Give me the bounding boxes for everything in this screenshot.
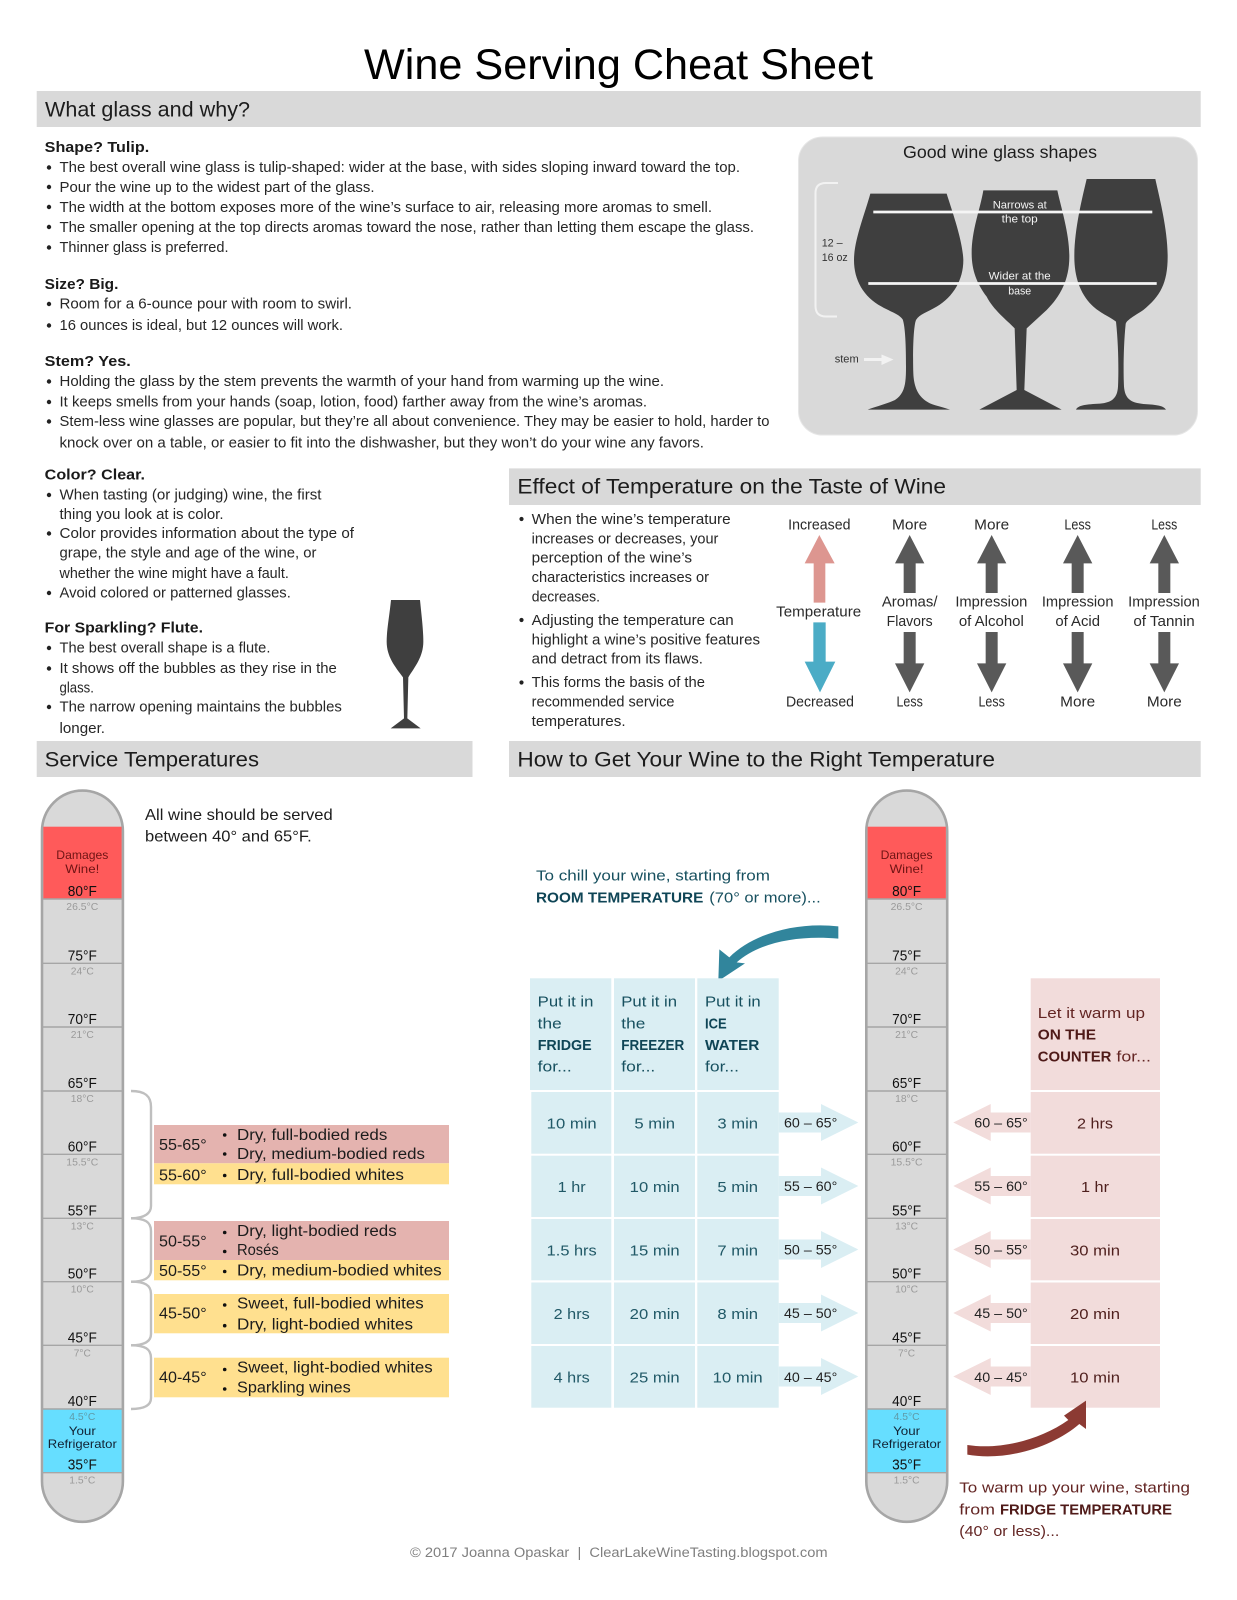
arrow: stem — [835, 354, 894, 366]
text block: temperature effect bullets: increases or decreases, your — [532, 531, 719, 547]
section header: service temperatures — [37, 741, 472, 777]
text block: sparkling: The best overall shape is a flute. — [60, 640, 270, 656]
text block: color: Color provides information about the type of — [60, 526, 354, 542]
thermometer: how to get to temperature: 15.5°C — [891, 1156, 923, 1168]
text block: sparkling — [45, 621, 342, 737]
thermometer: service temperatures: 35°F — [68, 1458, 97, 1474]
text block: shape: The best overall wine glass is tulip-shaped: wider at the base, with sides sloping inward toward the top. — [60, 160, 740, 176]
row: 45-50: 8 min — [717, 1307, 758, 1323]
row: 40-45: 25 min — [630, 1370, 680, 1386]
text block: to warm up your wine: To warm up your wine, starting — [959, 1481, 1190, 1497]
arrow column: acid: of Acid — [1055, 614, 1100, 630]
annotation: narrows at the top: the top — [1002, 214, 1038, 226]
text block: to warm up your wine: from — [959, 1502, 995, 1518]
header: ice water: WATER — [705, 1038, 760, 1054]
wine row: 45-50 whites: Dry, light-bodied whites — [237, 1316, 413, 1333]
arrows: chill ranges pointing to thermometer: 50 – 55° — [784, 1241, 837, 1257]
warm time values: 2 hrs — [1077, 1116, 1113, 1132]
text block: sparkling: longer. — [60, 721, 105, 737]
arrow: warm red curved — [967, 1401, 1086, 1456]
warm time values: 20 min — [1070, 1307, 1120, 1323]
thermometer: how to get to temperature — [866, 791, 947, 1522]
annotation: wider at the base: base — [1008, 285, 1031, 297]
text block: color: grape, the style and age of the wine, or — [60, 546, 317, 562]
arrow column: alcohol: of Alcohol — [959, 614, 1024, 630]
header: freezer: Put it in — [621, 995, 677, 1011]
row: 60-65 — [547, 1116, 758, 1132]
wine row: 55-65 reds: 55-65° — [159, 1137, 207, 1154]
section header: What glass and why — [37, 91, 1201, 127]
wine row: 40-45 whites and sparkling: Sparkling wines — [237, 1379, 351, 1396]
section header: how to get your wine to the right temperature: How to Get Your Wine to the Right Temperature — [517, 748, 995, 772]
text block: temperature effect bullets: recommended service — [532, 695, 675, 711]
thermometer: how to get to temperature: 13°C — [895, 1220, 919, 1232]
text block: to warm up your wine: (40° or less)... — [959, 1524, 1059, 1540]
arrow: stem: stem — [835, 354, 859, 366]
thermometer: how to get to temperature: 80°F — [892, 884, 921, 900]
header: ice water: Put it in — [705, 995, 761, 1011]
arrows: warm ranges pointing to thermometer: 40 – 45° — [974, 1369, 1028, 1385]
wine glass silhouettes — [854, 179, 1168, 410]
header: on the counter — [1038, 1006, 1151, 1066]
arrow column: temperature: Increased — [788, 517, 850, 533]
header: ice water — [705, 995, 761, 1076]
arrows: chill ranges pointing to thermometer: 45 – 50° — [784, 1305, 837, 1321]
wine row: 45-50 whites: Sweet, full-bodied whites — [237, 1295, 424, 1312]
text block: stem: Stem-less wine glasses are popular, but they’re all about convenience. They may be easier to hold, harder to — [60, 414, 770, 430]
annotation: wider at the base — [989, 271, 1051, 297]
arrows: warm ranges pointing to thermometer: 45 – 50° — [974, 1305, 1028, 1321]
header: on the counter: Let it warm up — [1038, 1006, 1145, 1022]
text block: temperature effect bullets: decreases. — [532, 590, 600, 606]
thermometer: service temperatures: 45°F — [68, 1330, 97, 1346]
row: 50-55: 7 min — [717, 1244, 758, 1260]
arrows: chill ranges pointing to thermometer: 55 – 60° — [784, 1178, 837, 1194]
text block: color — [45, 468, 354, 601]
warm time values: 1 hr — [1081, 1180, 1109, 1196]
thermometer: how to get to temperature: 4.5°C — [894, 1411, 920, 1423]
arrow column: acid: Impression — [1042, 595, 1113, 611]
panel heading: Good wine glass shapes — [903, 142, 1097, 162]
wine row: 50-55 whites — [154, 1260, 449, 1280]
header: fridge: the — [538, 1016, 562, 1032]
text block: stem: knock over on a table, or easier to fit into the dishwasher, but they won’t do your wine any favors. — [60, 435, 704, 451]
arrow column: temperature — [776, 517, 861, 711]
thermometer: service temperatures: Your — [69, 1424, 96, 1438]
arrow column: temperature: Decreased — [786, 695, 854, 711]
panel: good wine glass shapes — [798, 137, 1198, 435]
arrow column: temperature: Temperature — [776, 605, 861, 621]
arrows: chill ranges pointing to thermometer: 60 – 65° — [784, 1114, 837, 1130]
arrow column: alcohol — [955, 517, 1027, 711]
text block: size: Room for a 6-ounce pour with room to swirl. — [60, 297, 352, 313]
guide lines — [868, 212, 1157, 284]
arrows: chill ranges pointing to thermometer — [779, 1104, 858, 1395]
arrow column: acid — [1042, 517, 1113, 711]
annotation: wider at the base: Wider at the — [989, 271, 1051, 283]
wine row: 55-65 reds: Dry, full-bodied reds — [237, 1127, 388, 1144]
arrow: chill teal curved — [718, 925, 838, 981]
text block: serving range — [145, 807, 333, 846]
wine row: 50-55 reds and roses: Rosés — [237, 1242, 279, 1259]
text block: temperature effect bullets — [519, 512, 760, 730]
wine row: 55-65 reds — [154, 1125, 449, 1163]
header: freezer — [621, 995, 685, 1076]
text block: color: whether the wine might have a fault. — [58, 566, 289, 582]
text block: shape: The smaller opening at the top directs aromas toward the nose, rather than letting them escape the glass. — [60, 220, 754, 236]
header: freezer: FREEZER — [621, 1038, 685, 1054]
arrow column: tannin: Less — [1151, 517, 1177, 533]
text block: shape: Pour the wine up to the widest part of the glass. — [60, 180, 375, 196]
section header: effect of temperature — [509, 468, 1201, 505]
thermometer: how to get to temperature: 70°F — [892, 1012, 921, 1028]
icon: flute glass — [387, 600, 423, 728]
row: 45-50 — [554, 1307, 758, 1323]
row: 40-45 — [554, 1370, 763, 1386]
table cells — [1031, 978, 1160, 1408]
wine row: 55-60 whites: Dry, full-bodied whites — [237, 1167, 404, 1184]
text block: shape: Thinner glass is preferred. — [60, 240, 228, 256]
thermometer: service temperatures: 55°F — [68, 1203, 97, 1219]
text block: to chill your wine: To chill your wine, starting from — [536, 869, 770, 885]
text block: temperature effect bullets: When the wine’s temperature — [532, 512, 731, 528]
text block: size: Size? Big. — [45, 277, 118, 293]
thermometer: service temperatures: 40°F — [68, 1394, 97, 1410]
thermometer: service temperatures: 7°C — [74, 1347, 91, 1359]
table: chill times — [530, 978, 779, 1408]
arrows: chill ranges pointing to thermometer: 40 – 45° — [784, 1369, 837, 1385]
section header: service temperatures: Service Temperatures — [45, 748, 259, 772]
text block: temperature effect bullets: This forms the basis of the — [532, 675, 705, 691]
thermometer: service temperatures: 80°F — [68, 884, 97, 900]
text block: sparkling: The narrow opening maintains the bubbles — [60, 700, 342, 716]
row: 55-60: 5 min — [717, 1180, 758, 1196]
thermometer: service temperatures: 18°C — [71, 1093, 94, 1105]
thermometer: how to get to temperature: 40°F — [892, 1394, 921, 1410]
arrow column: acid: More — [1060, 695, 1095, 711]
thermometer: service temperatures: Refrigerator — [48, 1437, 117, 1451]
thermometer: service temperatures: 65°F — [68, 1076, 97, 1092]
header: fridge: for... — [538, 1060, 572, 1076]
text block: color: Color? Clear. — [45, 468, 145, 484]
arrow column: aromas and flavors: Flavors — [887, 614, 933, 630]
text block: shape: The width at the bottom exposes more of the wine’s surface to air, releasing more aromas to smell. — [60, 200, 712, 216]
text block: temperature effect bullets: temperatures. — [532, 714, 626, 730]
thermometer: how to get to temperature: Wine! — [890, 862, 924, 876]
thermometer: how to get to temperature: 35°F — [892, 1458, 921, 1474]
text block: size — [45, 277, 352, 334]
thermometer: how to get to temperature: 60°F — [892, 1139, 921, 1155]
thermometer: service temperatures: 10°C — [71, 1284, 94, 1296]
wine row: 50-55 whites: Dry, medium-bodied whites — [237, 1262, 442, 1279]
thermometer: how to get to temperature: 55°F — [892, 1203, 921, 1219]
thermometer: how to get to temperature: Your — [893, 1424, 920, 1438]
arrow column: aromas and flavors: Less — [896, 695, 923, 711]
annotation: narrows at the top — [993, 200, 1048, 226]
thermometer: service temperatures: Damages — [56, 848, 108, 862]
header: fridge — [538, 995, 593, 1076]
arrow column: alcohol: More — [974, 517, 1009, 533]
warm time values — [1070, 1116, 1120, 1386]
arrow column: acid: Less — [1064, 517, 1091, 533]
header: on the counter: for... — [1116, 1050, 1151, 1066]
bracket: 12-16 oz — [816, 183, 848, 316]
header: freezer: for... — [621, 1060, 655, 1076]
wine row: 50-55 whites: 50-55° — [159, 1263, 207, 1280]
wine row: 40-45 whites and sparkling: 40-45° — [159, 1369, 207, 1386]
thermometer: how to get to temperature: 7°C — [898, 1347, 915, 1359]
section header: how to get your wine to the right temperature — [509, 741, 1201, 777]
bracket: 12-16 oz: 12 – — [822, 238, 843, 250]
thermometer: service temperatures: Wine! — [65, 862, 99, 876]
warm time values: 10 min — [1070, 1370, 1120, 1386]
text block: to warm up your wine — [959, 1481, 1190, 1540]
text block: shape — [45, 140, 754, 256]
title: Wine Serving Cheat Sheet — [364, 41, 873, 89]
thermometer: service temperatures: 75°F — [68, 948, 97, 964]
header: ice water: ICE — [705, 1016, 727, 1032]
thermometer: service temperatures: 60°F — [68, 1139, 97, 1155]
wine row: 50-55 reds and roses: Dry, light-bodied reds — [237, 1223, 397, 1240]
thermometer: service temperatures — [42, 791, 123, 1522]
table: warm times — [1031, 978, 1160, 1408]
row: 45-50: 2 hrs — [554, 1307, 590, 1323]
row: 50-55: 15 min — [630, 1244, 680, 1260]
row: 55-60 — [558, 1180, 758, 1196]
chart: temperature effect arrows — [776, 517, 1200, 711]
text block: stem: Holding the glass by the stem prevents the warmth of your hand from warming up the wine. — [60, 374, 664, 390]
bracket: 12-16 oz: 16 oz — [822, 252, 848, 264]
thermometer: how to get to temperature: 50°F — [892, 1267, 921, 1283]
text block: sparkling: For Sparkling? Flute. — [45, 621, 203, 637]
header: on the counter: ON THE — [1038, 1027, 1096, 1043]
thermometer: service temperatures: 21°C — [71, 1029, 94, 1041]
thermometer: service temperatures: 26.5°C — [66, 901, 99, 913]
wine row: 40-45 whites and sparkling — [154, 1358, 449, 1397]
row: 50-55 — [547, 1244, 758, 1260]
thermometer: how to get to temperature: 21°C — [895, 1029, 919, 1041]
text block: size: 16 ounces is ideal, but 12 ounces will work. — [60, 318, 343, 334]
footer credit: © 2017 Joanna Opaskar | ClearLakeWineTasting.blogspot.com — [410, 1545, 828, 1560]
text block: color: When tasting (or judging) wine, the first — [60, 487, 322, 503]
table header cells — [530, 978, 779, 1090]
text block: stem: It keeps smells from your hands (soap, lotion, food) farther away from the wine’s aromas. — [60, 394, 647, 410]
thermometer: service temperatures: 24°C — [71, 966, 94, 978]
section header: What glass and why: What glass and why? — [45, 98, 250, 122]
row: 55-60: 10 min — [630, 1180, 680, 1196]
text block: sparkling: glass. — [60, 680, 94, 696]
text block: to chill your wine: ROOM TEMPERATURE — [536, 890, 703, 906]
thermometer: service temperatures: 15.5°C — [66, 1156, 99, 1168]
text block: color: thing you look at is color. — [60, 507, 224, 523]
arrow column: alcohol: Impression — [955, 595, 1027, 611]
thermometer: service temperatures: 70°F — [68, 1012, 97, 1028]
row: 55-60: 1 hr — [558, 1180, 586, 1196]
arrow column: tannin: of Tannin — [1133, 614, 1195, 630]
section header: effect of temperature: Effect of Temperature on the Taste of Wine — [517, 474, 946, 498]
text block: to chill your wine — [536, 869, 821, 906]
row: 60-65: 5 min — [634, 1116, 675, 1132]
wine row: 45-50 whites — [154, 1294, 449, 1333]
arrows: warm ranges pointing to thermometer: 55 – 60° — [974, 1178, 1028, 1194]
text block: color: Avoid colored or patterned glasses. — [60, 585, 291, 601]
text block: serving range: between 40° and 65°F. — [145, 829, 312, 846]
arrow column: tannin — [1128, 517, 1200, 711]
row: 45-50: 20 min — [630, 1307, 680, 1323]
header: freezer: the — [621, 1016, 645, 1032]
wine row: 45-50 whites: 45-50° — [159, 1305, 207, 1322]
row: 50-55: 1.5 hrs — [547, 1244, 597, 1260]
arrow column: alcohol: Less — [978, 695, 1005, 711]
warm time values: 30 min — [1070, 1244, 1120, 1260]
text block: stem: Stem? Yes. — [45, 354, 131, 370]
row: 40-45: 10 min — [713, 1370, 763, 1386]
text block: temperature effect bullets: Adjusting the temperature can — [532, 613, 734, 629]
thermometer: how to get to temperature: 24°C — [895, 966, 919, 978]
thermometer: how to get to temperature: 75°F — [892, 948, 921, 964]
wine row: 50-55 reds and roses: 50-55° — [159, 1234, 207, 1251]
brackets: temperature ranges — [131, 1091, 151, 1409]
text block: serving range: All wine should be served — [145, 807, 333, 824]
thermometer: service temperatures: 4.5°C — [69, 1411, 96, 1423]
thermometer: service temperatures: 50°F — [68, 1267, 97, 1283]
thermometer: how to get to temperature: 65°F — [892, 1076, 921, 1092]
wine row: 40-45 whites and sparkling: Sweet, light-bodied whites — [237, 1360, 433, 1377]
arrows: warm ranges pointing to thermometer: 60 – 65° — [974, 1114, 1028, 1130]
text block: stem — [45, 354, 770, 451]
thermometer: how to get to temperature: Damages — [881, 848, 933, 862]
wine row: 55-65 reds: Dry, medium-bodied reds — [237, 1146, 425, 1163]
text block: shape: Shape? Tulip. — [45, 140, 149, 156]
row: 60-65: 10 min — [547, 1116, 597, 1132]
arrow column: aromas and flavors: Aromas/ — [882, 595, 938, 611]
header: fridge: FRIDGE — [538, 1038, 592, 1054]
text block: to chill your wine: (70° or more)... — [709, 890, 821, 906]
thermometer: service temperatures: 1.5°C — [69, 1475, 96, 1487]
thermometer: how to get to temperature: 10°C — [895, 1284, 919, 1296]
arrows: warm ranges pointing to thermometer: 50 – 55° — [974, 1241, 1028, 1257]
text block: temperature effect bullets: perception of the wine’s — [532, 551, 692, 567]
thermometer: how to get to temperature: 45°F — [892, 1330, 921, 1346]
wine row: 55-60 whites — [154, 1163, 449, 1185]
text block: sparkling: It shows off the bubbles as they rise in the — [60, 661, 337, 677]
arrow column: aromas and flavors: More — [892, 517, 927, 533]
arrow column: tannin: More — [1147, 695, 1182, 711]
table body cells — [531, 1092, 779, 1408]
thermometer: how to get to temperature: 18°C — [895, 1093, 919, 1105]
text block: temperature effect bullets: highlight a wine’s positive features — [532, 632, 760, 648]
wine row: 55-60 whites: 55-60° — [159, 1168, 207, 1185]
text block: temperature effect bullets: characteristics increases or — [532, 570, 709, 586]
arrows: warm ranges pointing to thermometer — [953, 1104, 1031, 1395]
row: 60-65: 3 min — [717, 1116, 758, 1132]
thermometer: how to get to temperature: 26.5°C — [891, 901, 923, 913]
wine row: 50-55 reds and roses — [154, 1221, 449, 1260]
text block: temperature effect bullets: and detract from its flaws. — [532, 652, 703, 668]
header: on the counter: COUNTER — [1038, 1050, 1112, 1066]
arrow column: tannin: Impression — [1128, 595, 1200, 611]
arrow column: aromas and flavors — [882, 517, 938, 711]
header: ice water: for... — [705, 1060, 739, 1076]
row: 40-45: 4 hrs — [554, 1370, 590, 1386]
thermometer: how to get to temperature: 1.5°C — [894, 1475, 920, 1487]
annotation: narrows at the top: Narrows at — [993, 200, 1048, 212]
header: fridge: Put it in — [538, 995, 593, 1011]
thermometer: how to get to temperature: Refrigerator — [872, 1437, 941, 1451]
text block: to warm up your wine: FRIDGE TEMPERATURE — [1000, 1502, 1172, 1518]
thermometer: service temperatures: 13°C — [71, 1220, 94, 1232]
